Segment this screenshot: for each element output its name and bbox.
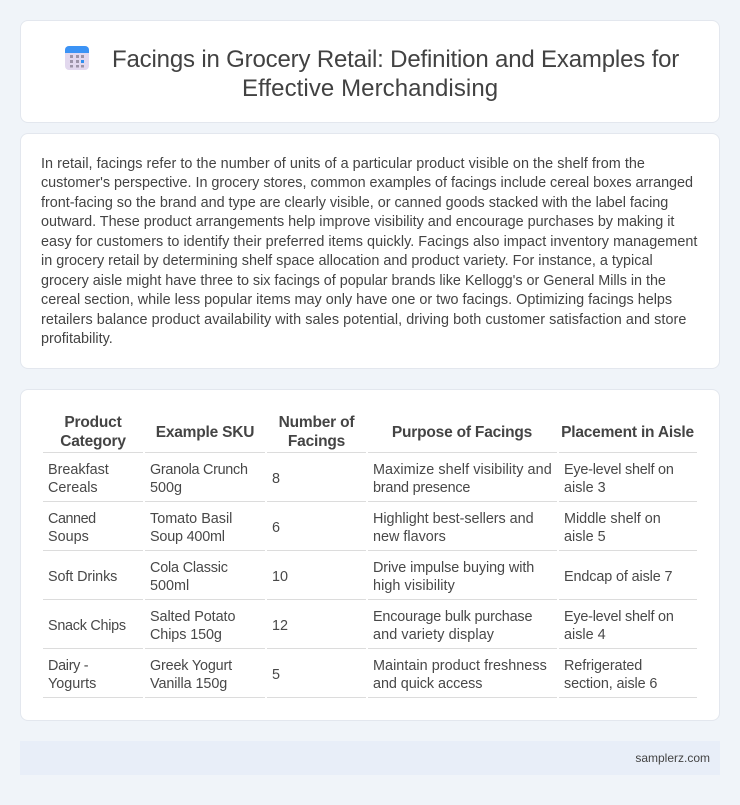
- row: canned soups: [48, 511, 661, 545]
- row: soft drinks: Drive impulse buying with: [373, 560, 534, 576]
- row: snack chips: Eye-level shelf on: [564, 609, 674, 625]
- row: snack chips: [48, 609, 674, 643]
- row: dairy yogurts: Refrigerated: [564, 658, 642, 674]
- panel: introduction: [20, 133, 720, 369]
- row: canned soups: aisle 5: [564, 529, 606, 545]
- title: Effective Merchandising: [242, 75, 498, 102]
- panel: table: [20, 389, 720, 721]
- row: breakfast cereals: brand presence: [373, 480, 470, 496]
- intro paragraph: retailers balance product availability with sales potential, driving both customer satisfaction and store: [41, 312, 686, 328]
- row: canned soups: new flavors: [373, 529, 446, 545]
- header: product category: Category: [60, 433, 126, 450]
- row: soft drinks: Endcap of aisle 7: [564, 569, 672, 585]
- intro paragraph: front-facing so the brand and type are clearly visible, or canned goods stacked with the label facing: [41, 195, 668, 211]
- footer text: samplerz.com: [635, 751, 710, 765]
- intro paragraph: outward. These product arrangements help improve visibility and encourage purchases by making it: [41, 214, 674, 230]
- row: canned soups: Soups: [48, 529, 89, 545]
- row: soft drinks: 10: [272, 569, 288, 585]
- row: dairy yogurts: Dairy -: [48, 658, 88, 674]
- row: snack chips: and variety display: [373, 627, 494, 643]
- row: snack chips: 12: [272, 618, 288, 634]
- header: product category: [60, 414, 126, 450]
- icon: calendar: [65, 46, 89, 70]
- row: canned soups: Middle shelf on: [564, 511, 661, 527]
- row: dairy yogurts: Vanilla 150g: [150, 676, 227, 692]
- row: snack chips: Snack Chips: [48, 618, 126, 634]
- row: canned soups: Tomato Basil: [150, 511, 232, 527]
- intro paragraph: profitability.: [41, 331, 113, 347]
- intro paragraph: customer's perspective. In grocery stores, common examples of facings include cereal boxes arranged: [41, 175, 693, 191]
- header: number of facings: [279, 414, 355, 450]
- row: canned soups: Soup 400ml: [150, 529, 225, 545]
- intro paragraph: In retail, facings refer to the number of units of a particular product visible on the shelf from the: [41, 156, 645, 172]
- row: soft drinks: high visibility: [373, 578, 455, 594]
- row: soft drinks: [48, 560, 672, 594]
- footer bar: [20, 741, 720, 775]
- row: breakfast cereals: Eye-level shelf on: [564, 462, 674, 478]
- header: example SKU: Example SKU: [156, 424, 254, 441]
- row: dairy yogurts: Yogurts: [48, 676, 96, 692]
- title card: [20, 20, 720, 123]
- row: breakfast cereals: Granola Crunch: [150, 462, 248, 478]
- row: snack chips: Salted Potato: [150, 609, 235, 625]
- header: purpose of facings: Purpose of Facings: [392, 424, 532, 441]
- row: breakfast cereals: [48, 462, 674, 496]
- row: dairy yogurts: Maintain product freshness: [373, 658, 547, 674]
- row: soft drinks: 500ml: [150, 578, 189, 594]
- intro paragraph: [41, 156, 698, 347]
- row: breakfast cereals: Cereals: [48, 480, 98, 496]
- row: breakfast cereals: Breakfast: [48, 462, 109, 478]
- row: breakfast cereals: aisle 3: [564, 480, 606, 496]
- row: snack chips: aisle 4: [564, 627, 606, 643]
- title: [112, 46, 679, 102]
- intro paragraph: cereal section, while less popular items may only have one or two facings. Optimizing facings helps: [41, 292, 672, 308]
- header: number of facings: Number of: [279, 414, 354, 431]
- row: breakfast cereals: Maximize shelf visibility and: [373, 462, 552, 478]
- header: number of facings: Facings: [288, 433, 345, 450]
- row: dairy yogurts: Greek Yogurt: [150, 658, 232, 674]
- row: dairy yogurts: section, aisle 6: [564, 676, 657, 692]
- row: dairy yogurts: 5: [272, 667, 280, 683]
- row: canned soups: Highlight best-sellers and: [373, 511, 534, 527]
- intro paragraph: grocery aisle might have three to six facings of popular brands like Kellogg's or General Mills in the: [41, 273, 666, 289]
- table header row: [60, 414, 694, 450]
- intro paragraph: easy for customers to identify their preferred items quickly. Facings also impact inventory management: [41, 234, 697, 250]
- row: soft drinks: Soft Drinks: [48, 569, 117, 585]
- row: canned soups: Canned: [48, 511, 96, 527]
- row: soft drinks: Cola Classic: [150, 560, 228, 576]
- row: breakfast cereals: 8: [272, 471, 280, 487]
- row: snack chips: Encourage bulk purchase: [373, 609, 532, 625]
- row: dairy yogurts: [48, 658, 657, 692]
- intro paragraph: in grocery retail by determining shelf space allocation and product variety. For instance, a typical: [41, 253, 653, 269]
- title: Facings in Grocery Retail: Definition and Examples for: [112, 46, 679, 73]
- header: placement in aisle: Placement in Aisle: [561, 424, 694, 441]
- header: product category: Product: [64, 414, 122, 431]
- row: breakfast cereals: 500g: [150, 480, 182, 496]
- row: canned soups: 6: [272, 520, 280, 536]
- row: snack chips: Chips 150g: [150, 627, 222, 643]
- row: dairy yogurts: and quick access: [373, 676, 482, 692]
